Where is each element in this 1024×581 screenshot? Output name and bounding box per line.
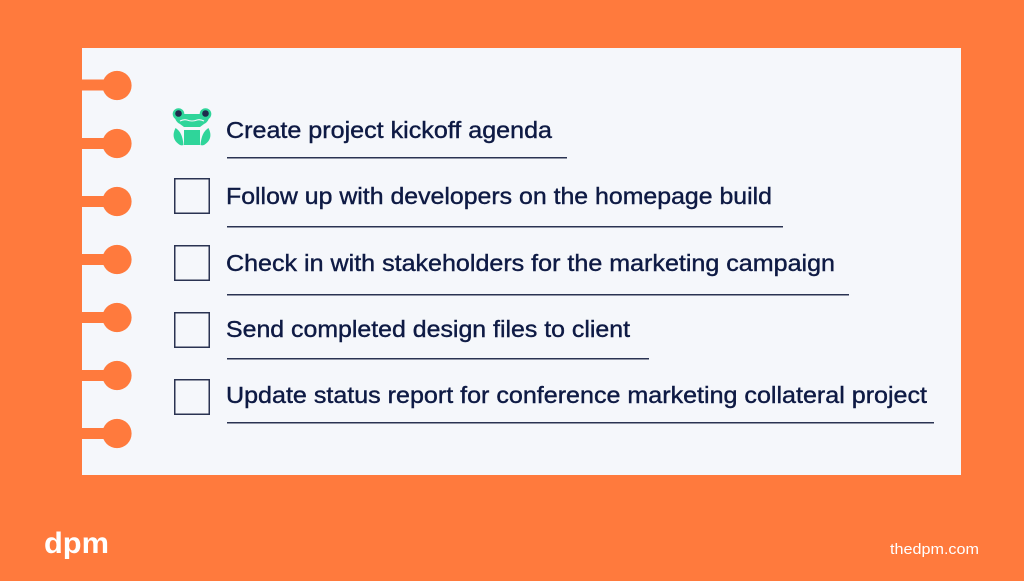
task 5: checkbox bbox=[175, 380, 209, 414]
task 2: text: Follow up with developers on the homepage build bbox=[226, 183, 772, 209]
spiral binding holes bbox=[82, 71, 132, 448]
task 1: underline bbox=[227, 157, 567, 158]
task 4: underline bbox=[227, 358, 649, 360]
website url: thedpm.com bbox=[890, 541, 979, 558]
task 3: text: Check in with stakeholders for the marketing campaign bbox=[226, 250, 835, 276]
panel: notepad page bbox=[82, 48, 961, 475]
task 4: checkbox bbox=[175, 313, 209, 347]
task 3: checkbox bbox=[175, 246, 209, 280]
task 5: underline bbox=[227, 422, 934, 424]
logo: dpm: dpm bbox=[44, 527, 109, 560]
task 1: text: Create project kickoff agenda bbox=[226, 117, 552, 143]
task 4: text: Send completed design files to client bbox=[226, 316, 631, 342]
task 2: underline bbox=[227, 226, 783, 228]
task 3: underline bbox=[227, 294, 849, 296]
task 5: text: Update status report for conference marketing collateral project bbox=[226, 382, 928, 408]
icon: green frog bbox=[173, 108, 211, 145]
task 2: checkbox bbox=[175, 179, 209, 213]
